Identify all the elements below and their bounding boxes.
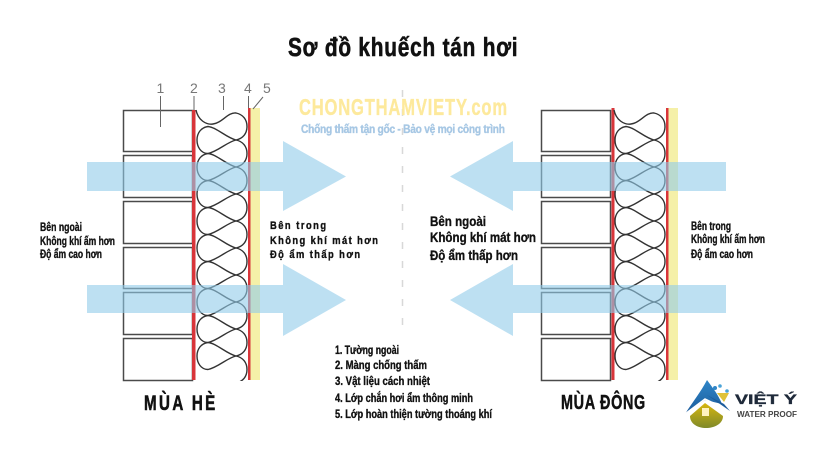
text: summer inside: Không khí mát hơn — [270, 235, 378, 247]
text: winter inside: Bên trong — [691, 221, 731, 233]
layer number callouts: 2 — [190, 80, 198, 96]
icon: window — [702, 408, 709, 416]
legend list: 3. Vật liệu cách nhiệt — [335, 376, 430, 388]
vapor barrier — [248, 108, 250, 380]
legend list: 2. Màng chống thấm — [335, 360, 427, 372]
finish layer — [668, 108, 678, 380]
bricks — [124, 110, 192, 380]
text: winter inside — [691, 221, 765, 261]
arrow: right lower — [450, 264, 726, 336]
icon: water drop — [685, 380, 722, 414]
legend list — [335, 345, 493, 421]
layer number callouts: 1 — [156, 80, 164, 96]
insulation — [614, 110, 665, 383]
layer number callouts: 3 — [218, 80, 226, 96]
waterproof membrane — [612, 108, 614, 380]
logo name: VIỆT Ý — [735, 390, 798, 407]
text: winter outside: Bên ngoài — [430, 213, 486, 229]
text: winter inside: Độ ẩm cao hơn — [691, 249, 753, 261]
icon: leaf — [717, 393, 729, 402]
text: summer outside: Độ ẩm cao hơn — [40, 249, 102, 261]
insulation — [196, 110, 247, 383]
layer number callouts: 4 — [244, 80, 252, 96]
text: summer inside: Độ ẩm thấp hơn — [270, 248, 360, 261]
centre divider — [402, 90, 404, 330]
right wall diagram — [542, 108, 678, 383]
watermark: slogan: Chống thấm tận gốc - Bảo vệ mọi công trình — [301, 123, 505, 136]
season label: summer: MÙA HÈ — [144, 390, 215, 415]
text: winter outside — [430, 213, 536, 263]
logo — [685, 380, 798, 428]
text: summer outside: Bên ngoài — [40, 222, 82, 234]
bricks — [542, 110, 610, 380]
text: winter outside: Độ ẩm thấp hơn — [430, 247, 518, 263]
arrow: right upper — [450, 141, 726, 211]
icon: bubbles — [713, 386, 717, 390]
text: summer inside — [270, 220, 378, 261]
layer number callouts: 5 — [263, 80, 271, 96]
legend list: 4. Lớp chắn hơi ẩm thông minh — [335, 392, 473, 405]
title: Sơ đồ khuếch tán hơi — [288, 33, 518, 62]
text: summer inside: Bên trong — [270, 220, 326, 232]
watermark: website: CHONGTHAMVIETY.com — [299, 95, 507, 121]
left wall diagram — [124, 108, 260, 383]
arrow: left lower — [87, 264, 346, 336]
text: winter outside: Không khí mát hơn — [430, 229, 536, 245]
waterproof membrane — [192, 110, 196, 380]
text: winter inside: Không khí ấm hơn — [691, 234, 765, 246]
arrow: left upper — [87, 141, 346, 211]
text: summer outside — [40, 222, 115, 261]
legend list: 1. Tường ngoài — [335, 345, 399, 357]
layer number callouts — [156, 80, 271, 127]
icon: roof — [685, 399, 730, 414]
season label: winter: MÙA ĐÔNG — [561, 391, 645, 414]
finish layer — [250, 108, 260, 380]
icon: house bowl — [690, 403, 723, 428]
logo tagline: WATER PROOF — [737, 410, 797, 419]
legend list: 5. Lớp hoàn thiện tường thoáng khí — [335, 409, 493, 421]
vapor barrier — [666, 108, 668, 380]
text: summer outside: Không khí ấm hơn — [40, 236, 115, 248]
